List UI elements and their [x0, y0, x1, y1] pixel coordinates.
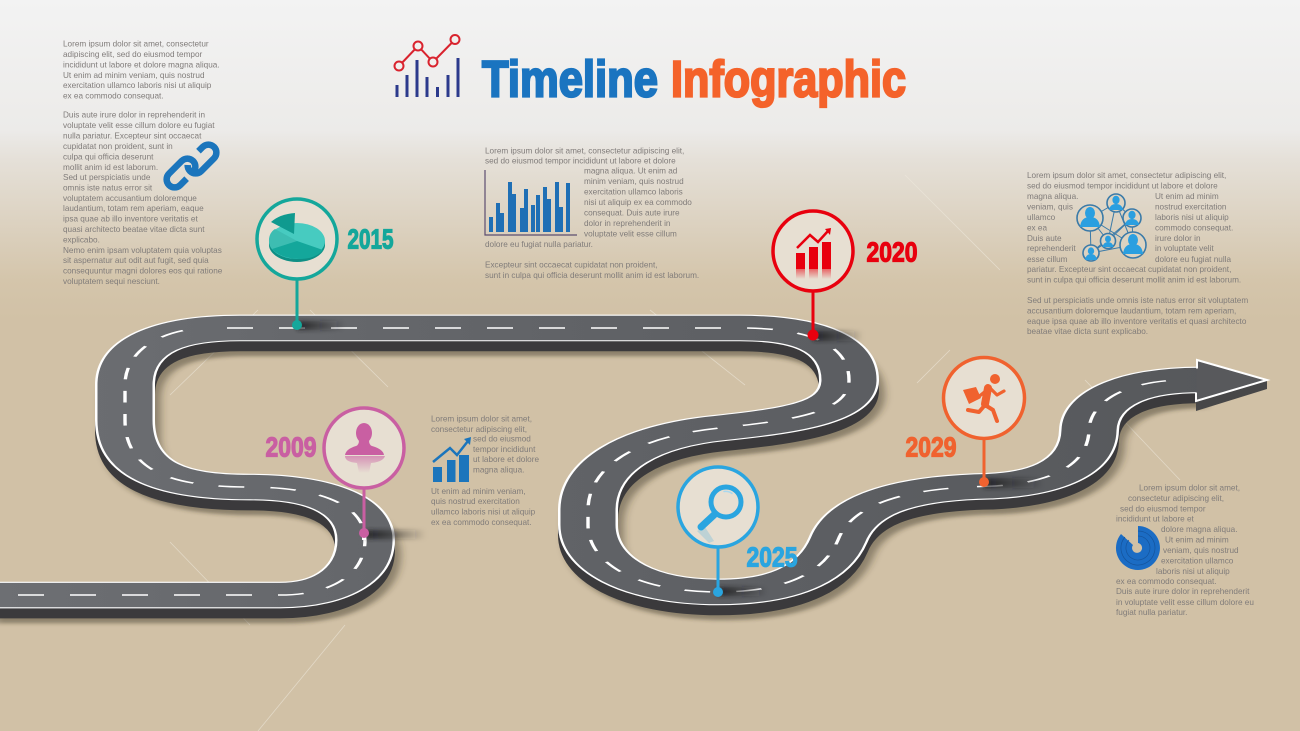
title [482, 50, 906, 108]
text block: top right: irure dolor in [1155, 234, 1201, 243]
text block: top right: ex ea [1027, 224, 1047, 232]
text block: 2009: tempor incididunt [473, 445, 536, 454]
text block: bottom right: in voluptate velit esse cillum dolore eu [1116, 598, 1254, 607]
title chart icon [394, 35, 460, 97]
text block: center top: dolore eu fugiat nulla pariatur. [485, 240, 593, 249]
arrow head [1196, 360, 1267, 401]
text block: top left: cupidatat non proident, sunt in [63, 142, 173, 151]
text block: 2009 [431, 414, 539, 527]
text block: top left: omnis iste natus error sit [63, 184, 153, 192]
text block: top right: beatae vitae dicta sunt explicabo. [1027, 327, 1148, 336]
text block: bottom right: Lorem ipsum dolor sit amet, [1139, 484, 1240, 492]
road side thickness [0, 338, 1200, 605]
text block: bottom right: Duis aute irure dolor in reprehenderit [1116, 587, 1250, 596]
text block: 2009: ut labore et dolore [473, 455, 539, 464]
text block: top right: reprehenderit [1027, 244, 1076, 253]
text block: center top: Lorem ipsum dolor sit amet, consectetur adipiscing elit, [485, 146, 684, 156]
pin 2009 [266, 408, 426, 540]
text block: center top: dolor in reprehenderit in [584, 219, 671, 228]
text block: center top: exercitation ullamco laboris [584, 188, 683, 196]
text block: top right: dolore eu fugiat nulla [1155, 255, 1231, 264]
title: Timeline [482, 50, 658, 108]
text block: top right: Lorem ipsum dolor sit amet, consectetur adipiscing elit, [1027, 171, 1226, 180]
text block: top right: accusantium doloremque laudantium, totam rem aperiam, [1027, 306, 1236, 316]
text block: top right: commodo consequat. [1155, 224, 1233, 232]
text block: bottom right: fugiat nulla pariatur. [1116, 608, 1187, 617]
text block: center top: Excepteur sint occaecat cupidatat non proident, [485, 260, 658, 270]
text block: top left: Nemo enim ipsam voluptatem quia voluptas [63, 246, 222, 255]
text block: 2009: quis nostrud exercitation [431, 497, 520, 506]
text block: top left: exercitation ullamco laboris nisi ut aliquip [63, 81, 212, 90]
text block: top left: adipiscing elit, sed do eiusmod tempor [63, 50, 203, 59]
text block: top right: sunt in culpa qui officia deserunt mollit anim id est laborum. [1027, 276, 1241, 284]
text block: top right [1027, 171, 1248, 336]
text block: bottom right: ex ea commodo consequat. [1116, 577, 1217, 586]
text block: top right: in voluptate velit [1155, 244, 1214, 253]
year 2015: 2015 [348, 224, 394, 254]
text block: bottom right: Ut enim ad minim [1165, 536, 1229, 544]
text block: bottom right: laboris nisi ut aliquip [1156, 567, 1230, 576]
decorative background hairlines [170, 175, 1180, 731]
icon: runner with briefcase [963, 374, 1004, 421]
text block: top left: voluptatem accusantium doloremque [63, 194, 197, 203]
text block: top right: Duis aute [1027, 234, 1062, 243]
text block: top left: Lorem ipsum dolor sit amet, consectetur [63, 40, 209, 48]
year 2020: 2020 [866, 236, 918, 268]
text block: top left: voluptate velit esse cillum dolore eu fugiat [63, 121, 215, 130]
text block: bottom right: consectetur adipiscing elit, [1128, 494, 1224, 503]
text block: top right: sed do eiusmod tempor incididunt ut labore et dolore [1027, 182, 1218, 190]
road ground shadow [0, 343, 1206, 610]
text block: bottom right: veniam, quis nostrud [1163, 546, 1239, 555]
text block: 2009: consectetur adipiscing elit, [431, 425, 527, 434]
icon: bar chart [485, 170, 577, 235]
year 2025: 2025 [746, 542, 798, 572]
icon: growth bars [433, 437, 471, 482]
icon: magnifier [697, 487, 741, 543]
text block: top left: mollit anim id est laborum. [63, 163, 158, 172]
year 2009: 2009 [266, 432, 316, 462]
icon: radial donut chart [1116, 526, 1160, 570]
icon: pie chart [269, 213, 325, 262]
text block: 2009: sed do eiusmod [473, 434, 531, 444]
text block: 2009: Lorem ipsum dolor sit amet, [431, 414, 532, 424]
text block: 2009: magna aliqua. [473, 466, 524, 474]
icon: people network [1077, 194, 1146, 261]
text block: 2009: ullamco laboris nisi ut aliquip [431, 508, 536, 516]
text block: center top: sed do eiusmod tempor incididunt ut labore et dolore [485, 156, 676, 166]
road centre dashes [18, 328, 1185, 595]
text block: top right: esse cillum [1027, 255, 1068, 264]
year 2029: 2029 [906, 432, 956, 462]
text block: top left: nulla pariatur. Excepteur sint occaecat [63, 132, 202, 140]
text block: center top: minim veniam, quis nostrud [584, 177, 684, 186]
text block: top right: pariatur. Excepteur sint occaecat cupidatat non proident, [1027, 265, 1231, 274]
text block: center top: voluptate velit esse cillum [584, 230, 677, 238]
text block: top right: Ut enim ad minim [1155, 192, 1219, 201]
pin 2015 [257, 199, 394, 330]
text block: top left: laudantium, totam rem aperiam, eaque [63, 204, 204, 213]
text block: top left: quasi architecto beatae vitae dicta sunt [63, 225, 205, 234]
text block: top left [63, 40, 223, 286]
text block: center top [485, 146, 699, 280]
icon: rising bars [796, 228, 831, 279]
text block: top left: culpa qui officia deserunt [63, 152, 154, 162]
text block: top left: Sed ut perspiciatis unde [63, 173, 151, 182]
text block: top left: ipsa quae ab illo inventore veritatis et [63, 214, 198, 224]
text block: top left: Duis aute irure dolor in reprehenderit in [63, 110, 205, 120]
text block: bottom right: dolore magna aliqua. [1161, 525, 1237, 534]
text block: top right: laboris nisi ut aliquip [1155, 213, 1229, 222]
text block: top left: Ut enim ad minim veniam, quis nostrud [63, 71, 205, 80]
text block: top left: sit aspernatur aut odit aut fugit, sed quia [63, 256, 209, 265]
text block: top right: veniam, quis [1027, 202, 1073, 212]
icon: chain link [163, 141, 220, 191]
pin 2020 [773, 211, 918, 341]
pin 2025 [678, 467, 798, 597]
text block: top right: ullamco [1027, 213, 1056, 222]
text block: bottom right: incididunt ut labore et [1116, 514, 1195, 524]
text block: center top: sunt in culpa qui officia deserunt mollit anim id est laborum. [485, 271, 699, 280]
text block: center top: magna aliqua. Ut enim ad [584, 166, 678, 176]
text block: top left: voluptatem sequi nesciunt. [63, 277, 160, 286]
text block: top left: consequuntur magni dolores eos qui ratione [63, 266, 223, 276]
icon: person [345, 423, 385, 473]
text block: 2009: ex ea commodo consequat. [431, 518, 532, 527]
text block: top right: eaque ipsa quae ab illo inventore veritatis et quasi architecto [1027, 317, 1247, 326]
text block: top left: explicabo. [63, 236, 100, 244]
text block: 2009: Ut enim ad minim veniam, [431, 487, 526, 496]
text block: center top: nisi ut aliquip ex ea commodo [584, 198, 692, 207]
text block: top right: magna aliqua. [1027, 192, 1078, 201]
text block: center top: consequat. Duis aute irure [584, 208, 680, 218]
road surface [0, 328, 1200, 595]
text block: top right: Sed ut perspiciatis unde omnis iste natus error sit voluptatem [1027, 296, 1248, 305]
title: Infographic [671, 50, 906, 108]
text block: top left: ex ea commodo consequat. [63, 92, 164, 100]
road [0, 328, 1267, 610]
text block: top right: nostrud exercitation [1155, 202, 1227, 212]
arrow head side [1196, 380, 1267, 411]
pin 2029 [906, 358, 1044, 488]
text block: bottom right: exercitation ullamco [1161, 556, 1234, 566]
text block: bottom right: sed do eiusmod tempor [1120, 504, 1206, 514]
text block: top left: incididunt ut labore et dolore magna aliqua. [63, 60, 220, 70]
text block: bottom right [1116, 484, 1254, 617]
